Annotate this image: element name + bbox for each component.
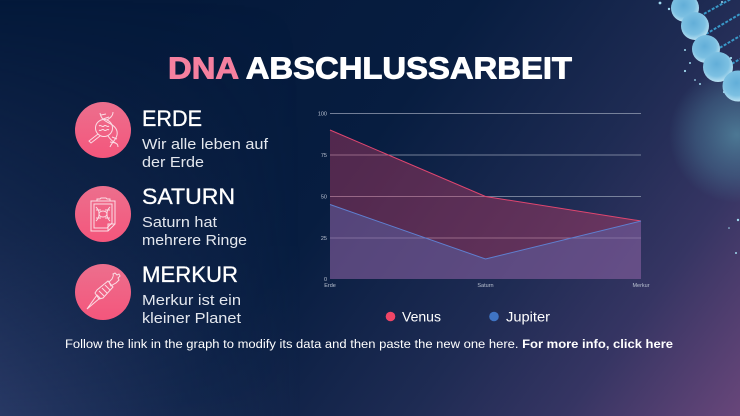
text: Merkur: kleiner Planet [142,311,241,327]
heading: Erde: ERDE [142,106,202,131]
y axis labels [318,112,327,283]
text: Saturn: mehrere Ringe [142,233,247,249]
text: Erde: Wir alle leben auf [142,137,269,153]
list item: Erde [75,102,269,171]
legend: Jupiter [489,310,551,324]
y axis labels: 100 [318,112,327,118]
text: Saturn: Saturn hat [142,215,217,231]
x axis labels: Erde [324,283,336,289]
x axis labels: Merkur [632,283,650,289]
text: Merkur: Merkur ist ein [142,293,241,309]
x axis labels [324,283,650,289]
heading: Merkur: MERKUR [142,262,238,287]
legend: Venus: Venus [402,310,441,324]
list item: Saturn [75,184,247,249]
legend [386,310,551,324]
y axis labels: 75 [321,153,327,159]
list item: Merkur [75,262,241,327]
icon: DNA with magnifier [75,102,131,158]
text: Erde: der Erde [142,155,204,171]
heading: Saturn: SATURN [142,184,235,209]
series: Venus [330,130,641,279]
y axis labels: 25 [321,236,327,242]
legend: Jupiter: Jupiter [506,310,551,324]
icon: clipboard [75,186,131,242]
y axis labels: 50 [321,194,327,200]
footer text: Follow the link in the graph to modify its data and then paste the new one here. For more info, click here [65,337,673,351]
series: Jupiter [330,204,641,279]
x axis labels: Saturn [477,283,494,289]
y axis labels: 0 [324,277,327,283]
title: DNA ABSCHLUSSARBEIT [168,50,572,86]
decoration: DNA strand [659,0,740,254]
legend: Venus [386,310,441,324]
icon: pipette [75,264,131,320]
area chart [318,112,650,289]
